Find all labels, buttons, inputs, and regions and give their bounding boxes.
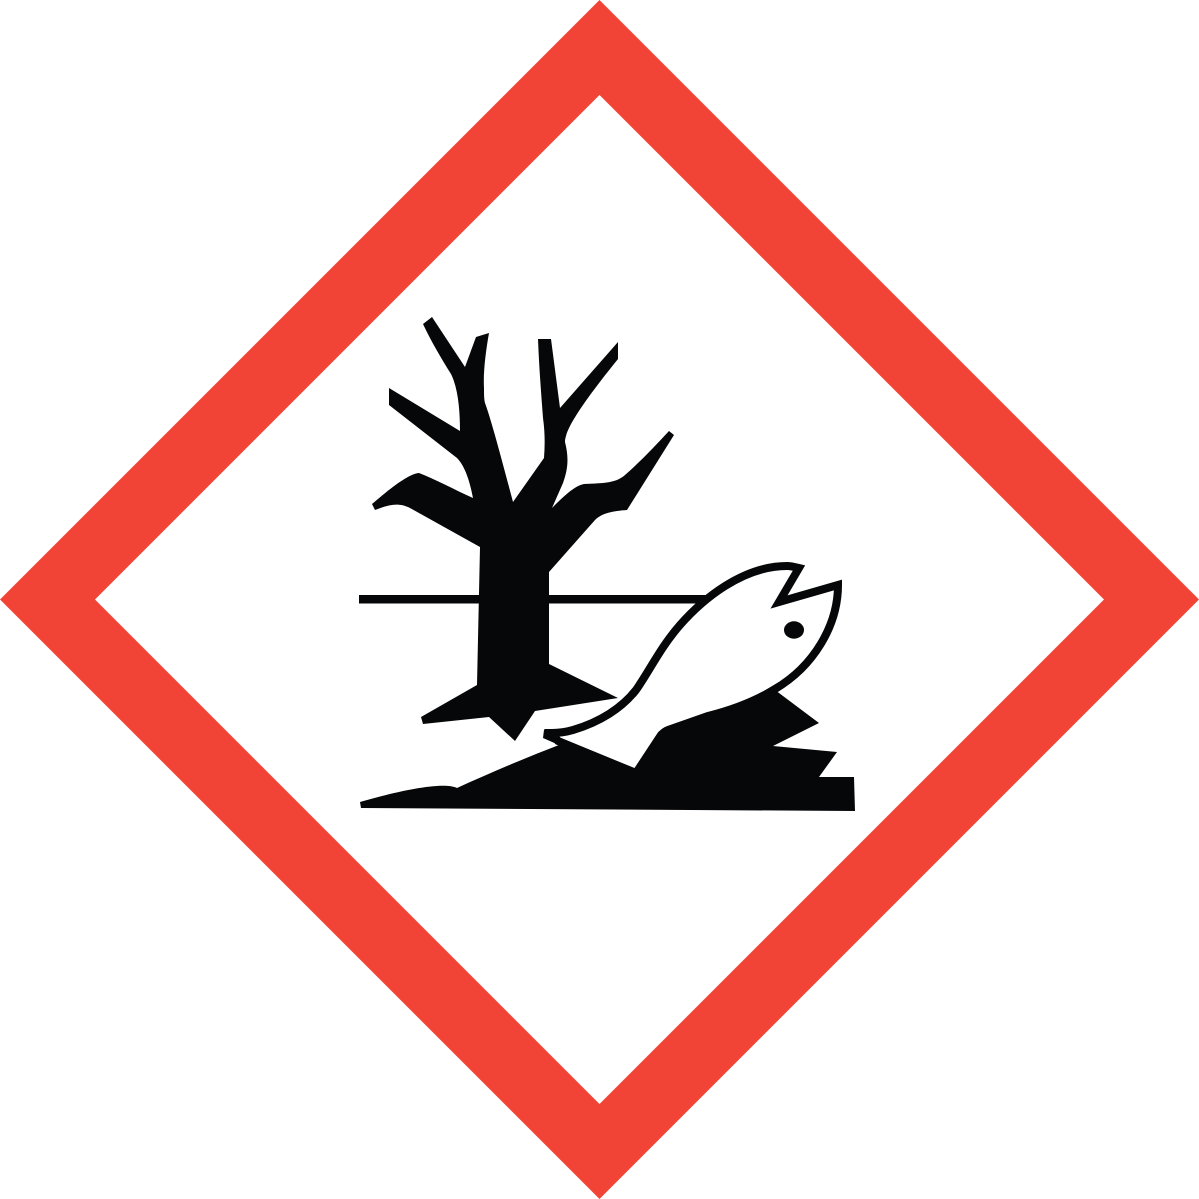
icon: ground (360, 690, 855, 811)
icon: dead fish (552, 566, 838, 773)
fish eye (784, 621, 804, 639)
icon: dead tree (372, 317, 674, 741)
icon: water line (359, 595, 719, 604)
fish body with outline (552, 566, 838, 773)
